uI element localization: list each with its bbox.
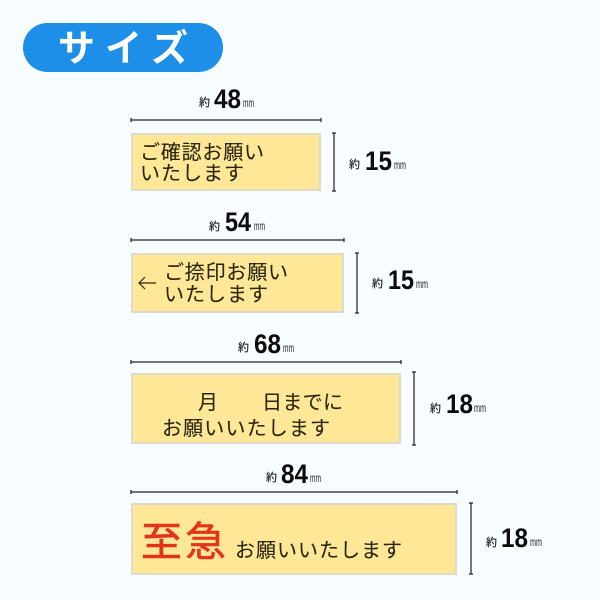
sticky note: ご確認お願いいたします: ご確認お願い xyxy=(140,141,264,164)
width dimension: 84 mm xyxy=(131,459,457,494)
width dimension: 48 mm: 約 xyxy=(199,95,210,109)
width dimension: 84 mm: 約 xyxy=(266,470,277,484)
height dimension: 18 mm: mm xyxy=(474,401,486,415)
panel: 48 x 15 mm label xyxy=(131,84,406,191)
sticky note: 至急お願いいたします: お願いいたします xyxy=(235,540,402,562)
sticky note: 月日までにお願いいたします: 日までに xyxy=(262,392,343,414)
width dimension: 54 mm: 54 xyxy=(225,207,251,237)
width dimension: 84 mm: mm xyxy=(310,471,321,485)
width dimension: 54 mm: 約 xyxy=(209,219,220,233)
width dimension: 68 mm: mm xyxy=(283,341,294,355)
width dimension: 54 mm xyxy=(131,207,344,242)
title badge: サイズ xyxy=(23,23,223,72)
height dimension: 15 mm: 15 xyxy=(388,265,414,295)
title badge: サイズ: サイズ xyxy=(58,28,188,69)
width dimension: 48 mm xyxy=(131,84,321,122)
height dimension: 18 mm: 18 xyxy=(501,523,528,553)
sticky note: ←ご捺印お願いいたします: いたします xyxy=(164,284,268,306)
sticky note: ご確認お願いいたします xyxy=(132,134,320,190)
height dimension: 18 mm: 約 xyxy=(486,535,497,549)
sticky note: 至急お願いいたします: 至急 xyxy=(141,519,226,565)
panel: 68 x 18 mm label xyxy=(131,329,486,445)
height dimension: 18 mm: mm xyxy=(530,535,542,549)
sticky note: ご確認お願いいたします: いたします xyxy=(140,163,244,185)
sticky note: 月日までにお願いいたします: お願いいたします xyxy=(162,418,330,440)
width dimension: 68 mm: 68 xyxy=(254,329,281,359)
width dimension: 48 mm: mm xyxy=(243,96,254,110)
width dimension: 68 mm: 約 xyxy=(238,340,249,354)
height dimension: 15 mm: 約 xyxy=(349,157,360,171)
height dimension: 18 mm xyxy=(412,372,486,445)
width dimension: 54 mm: mm xyxy=(254,219,265,233)
panel: 84 x 18 mm label xyxy=(131,459,542,574)
height dimension: 15 mm: mm xyxy=(394,158,406,172)
sticky note: ←ご捺印お願いいたします: ご捺印お願い xyxy=(164,261,288,284)
panel: 54 x 15 mm label xyxy=(131,207,428,313)
height dimension: 15 mm xyxy=(332,133,406,191)
height dimension: 15 mm: mm xyxy=(416,277,428,291)
sticky note: 至急お願いいたします xyxy=(132,504,456,574)
height dimension: 15 mm xyxy=(355,253,428,313)
sticky note: ←ご捺印お願いいたします xyxy=(132,254,343,312)
width dimension: 84 mm: 84 xyxy=(281,459,308,489)
width dimension: 48 mm: 48 xyxy=(214,84,241,114)
height dimension: 18 mm: 18 xyxy=(446,389,473,419)
sticky note: 月日までにお願いいたします: 月 xyxy=(198,392,218,414)
width dimension: 68 mm xyxy=(131,329,401,364)
height dimension: 15 mm: 約 xyxy=(372,276,383,290)
height dimension: 18 mm: 約 xyxy=(430,401,441,415)
icon: left arrow xyxy=(139,277,156,289)
height dimension: 18 mm xyxy=(469,503,542,574)
sticky note: 月日までにお願いいたします xyxy=(132,374,400,443)
height dimension: 15 mm: 15 xyxy=(365,146,392,176)
